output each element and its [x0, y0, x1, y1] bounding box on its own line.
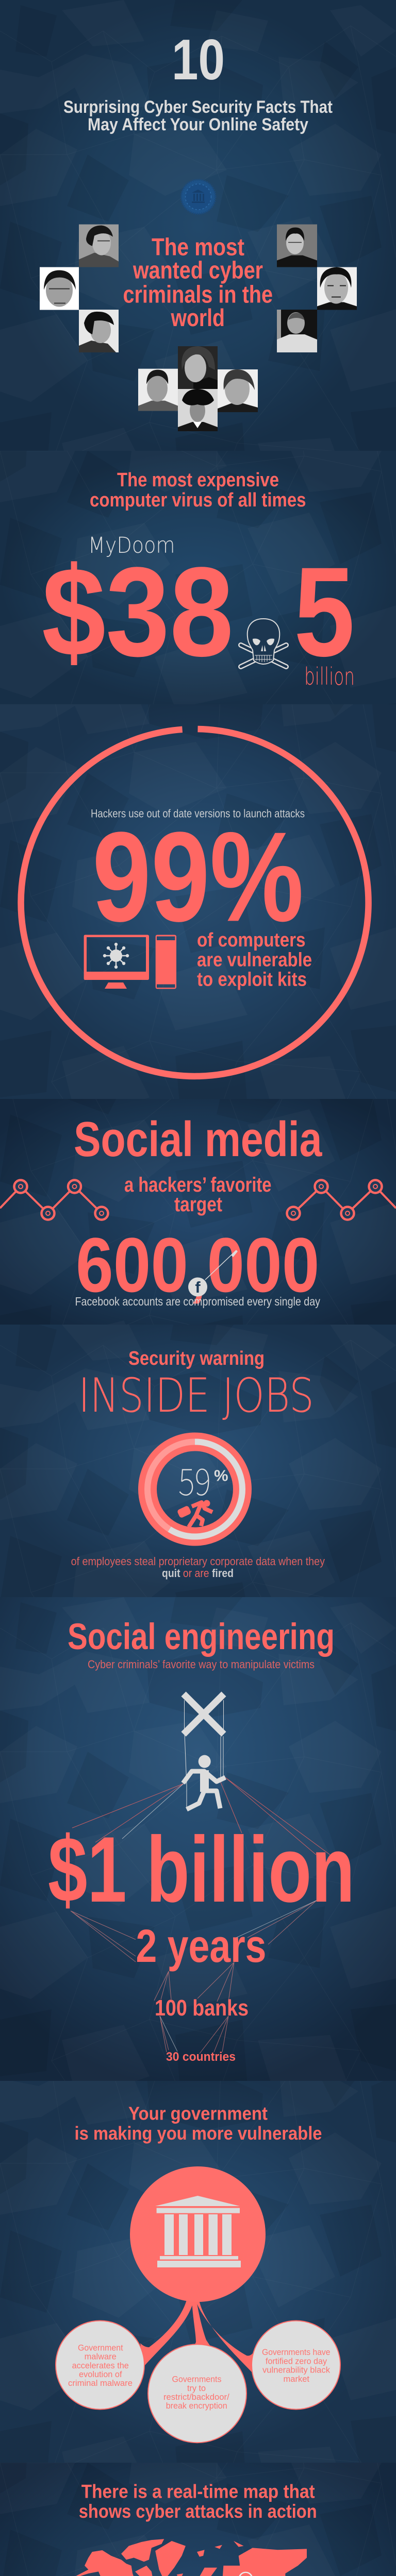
chart: 59% donut: [147, 1442, 242, 1536]
photos of wanted criminals: [40, 225, 357, 431]
ring text: [197, 929, 312, 991]
heading: most wanted: world: [171, 304, 225, 331]
heading: social engineering: Social engineering: [68, 1617, 335, 1657]
heading: government: is making you more vulnerable: [74, 2123, 322, 2144]
stats: years, banks, countries: [136, 1921, 266, 2064]
icon: puppet on strings: [72, 1694, 330, 1855]
diagram: government bubbles: [56, 2166, 340, 2443]
bubble: encryption: Governments: [172, 2375, 222, 2384]
main circle: [130, 2166, 266, 2302]
big figure: $38.5 billion: [42, 541, 355, 690]
bubble: malware: Government: [78, 2343, 123, 2352]
title: Surprising Cyber Security Facts That: [63, 97, 333, 117]
bubble: zero day: vulnerability black: [262, 2365, 330, 2375]
heading: social media: target: [174, 1193, 222, 1216]
bubble: malware: accelerates the: [72, 2361, 129, 2370]
big figure: $38.5 billion: $38: [42, 541, 234, 683]
ring text: to exploit kits: [197, 969, 307, 991]
heading: real-time map: shows cyber attacks in action: [79, 2501, 317, 2522]
bubble: zero day: [252, 2320, 340, 2409]
label: MyDoom: MyDoom: [88, 533, 175, 558]
stats: years, banks, countries: 2 years: [136, 1921, 266, 1972]
icon: infected computer: [84, 935, 176, 989]
bubble: encryption: restrict/backdoor/: [163, 2392, 229, 2402]
big figure: $38.5 billion: billion: [304, 663, 355, 690]
bubble: malware: criminal malware: [68, 2378, 133, 2388]
bubble: zero day: fortified zero day: [266, 2356, 327, 2366]
red strings to text: [72, 1777, 330, 1855]
icon: bank building: [155, 2196, 241, 2267]
bubble: malware: evolution of: [79, 2369, 122, 2379]
panel: 99% ring: [21, 729, 369, 1076]
connector threads: [71, 1901, 317, 2054]
caption: employees steal data: quit or are fired: [162, 1567, 234, 1580]
attack markers: [123, 2572, 252, 2576]
caption: employees steal data: of employees steal proprietary corporate data when they: [71, 1555, 325, 1568]
heading: social media: [74, 1112, 322, 1216]
heading: most wanted: wanted cyber: [133, 257, 263, 283]
heading: government: Your government: [128, 2103, 268, 2124]
caption: facebook accounts: Facebook accounts are compromised every single day: [75, 1295, 320, 1308]
icon: running thief: [177, 1500, 212, 1527]
heading: real-time map: [79, 2481, 317, 2522]
chart: 59% donut: %: [214, 1466, 228, 1485]
title: 10: [172, 28, 225, 92]
big figure: 600,000: 600,000: [76, 1222, 320, 1308]
heading: real-time map: There is a real-time map that: [81, 2481, 315, 2502]
bubble: encryption: try to: [187, 2383, 206, 2393]
icon: FBI seal: [182, 180, 216, 214]
bubble: malware: [56, 2320, 144, 2409]
heading: most expensive virus: computer virus of all times: [90, 489, 306, 511]
heading: inside jobs: INSIDE JOBS: [78, 1369, 314, 1423]
ring text: of computers: [197, 929, 305, 951]
ring caption: Hackers use out of date versions to launch attacks: [91, 807, 305, 820]
bubble: zero day: market: [284, 2374, 309, 2384]
big figure: $38.5 billion: 5: [294, 541, 355, 683]
caption: employees steal data: [71, 1555, 325, 1580]
heading: inside jobs: [78, 1348, 314, 1423]
heading: most expensive virus: The most expensive: [117, 469, 279, 491]
strings: [185, 1700, 224, 1808]
icon: skull and crossbones: [241, 619, 286, 667]
bubble: encryption: [148, 2344, 246, 2443]
icon: facebook pin: f: [195, 1278, 201, 1296]
puppet control cross: [184, 1694, 224, 1734]
heading: most expensive virus: [90, 469, 306, 511]
icon: facebook pin: [188, 1250, 238, 1296]
heading: inside jobs: Security warning: [128, 1348, 265, 1369]
connectors: [140, 2300, 253, 2373]
bubble: malware: malware: [85, 2352, 117, 2362]
heading: most wanted: criminals in the: [123, 280, 273, 308]
heading: social engineering: [68, 1617, 335, 1671]
chart: world map: [70, 2539, 321, 2576]
heading: government: [74, 2103, 322, 2144]
puppet figure: [199, 1755, 211, 1768]
big figure: 99%: 99%: [92, 805, 304, 948]
ring text: are vulnerable: [197, 949, 312, 971]
title: [63, 28, 333, 134]
ring arc: [21, 729, 369, 1076]
heading: social engineering: Cyber criminals’ favorite way to manipulate victims: [88, 1658, 315, 1671]
bubble: zero day: Governments have: [262, 2347, 330, 2357]
heading: social media: a hackers’ favorite: [124, 1174, 271, 1196]
chart: 59% donut: 59: [178, 1452, 211, 1506]
stats: years, banks, countries: 30 countries: [166, 2050, 236, 2064]
stats: years, banks, countries: 100 banks: [155, 1995, 249, 2021]
heading: most wanted: The most: [152, 233, 244, 261]
heading: most wanted: [123, 233, 273, 331]
icon: network chains: [0, 1180, 396, 1220]
heading: social media: Social media: [74, 1112, 322, 1167]
title: May Affect Your Online Safety: [88, 115, 308, 134]
bubble: encryption: break encryption: [166, 2401, 227, 2411]
